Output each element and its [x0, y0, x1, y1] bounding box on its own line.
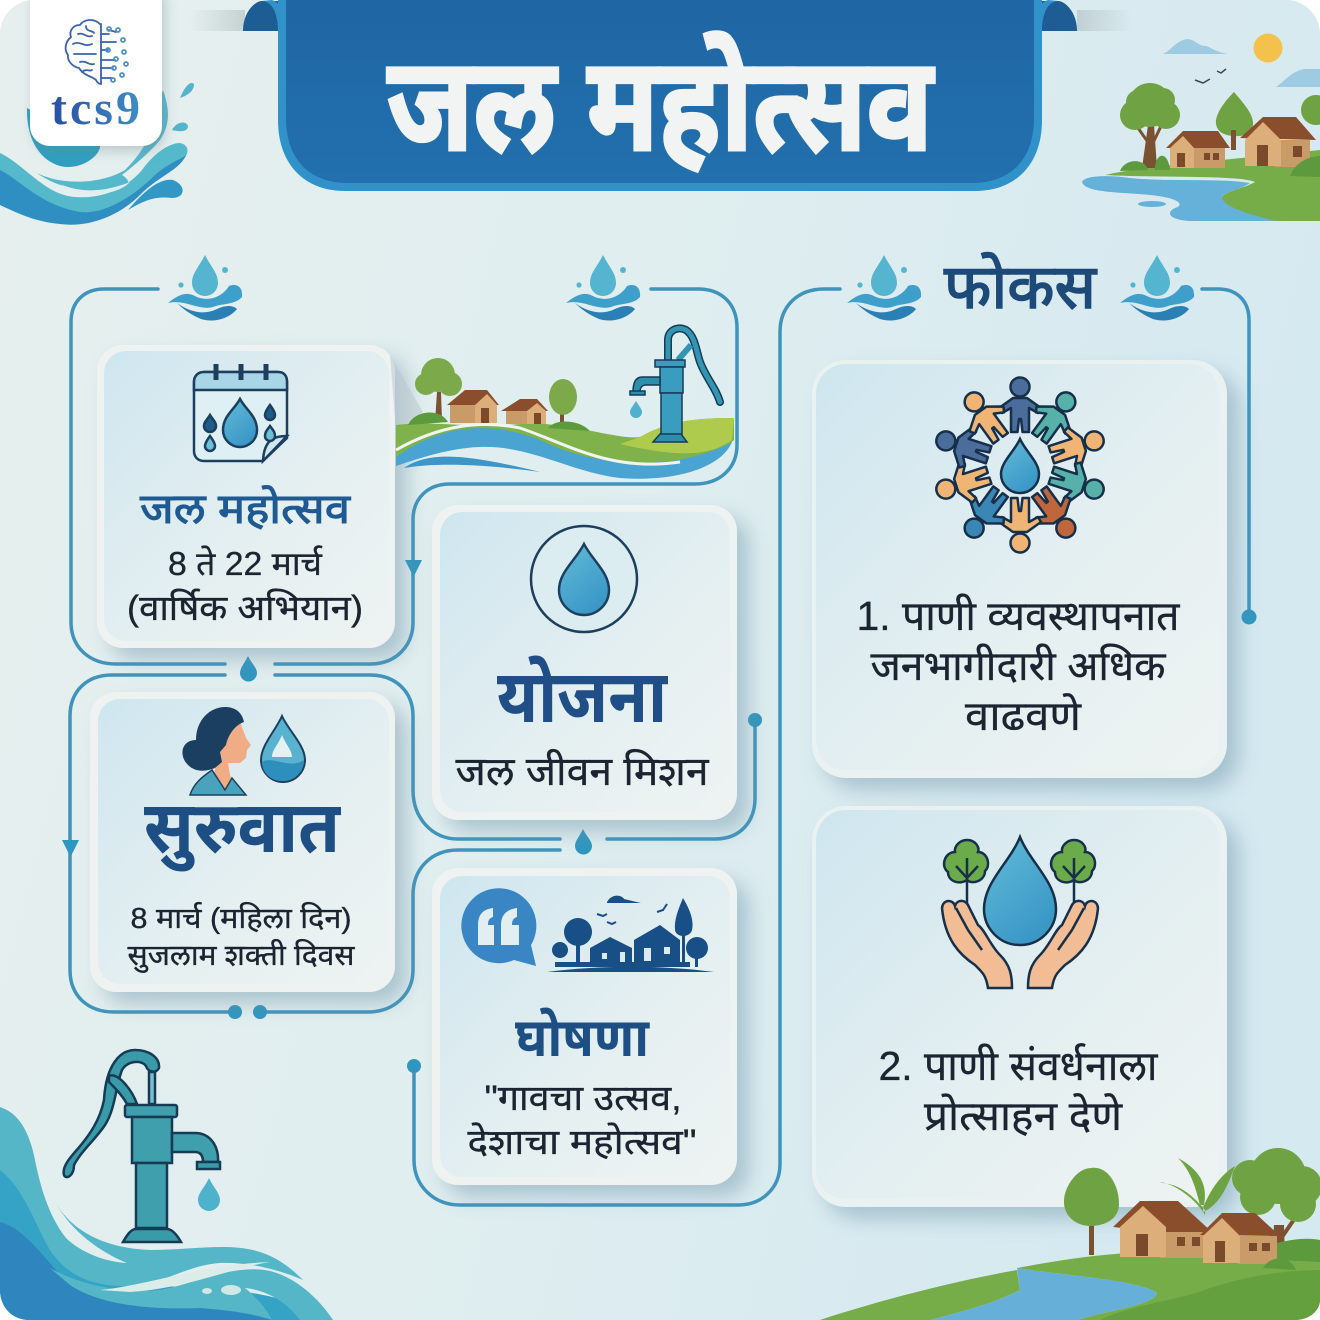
title text: जल महोत्सव — [387, 31, 935, 178]
panel: focus 1 card — [812, 360, 1227, 778]
panel: focus 1 card: वाढवणे — [965, 692, 1082, 739]
illustration: village and hand pump — [390, 328, 734, 479]
panel: focus 2 card: प्रोत्साहन देणे — [924, 1092, 1123, 1139]
card heading: सुरुवात — [144, 788, 341, 872]
big tree — [1272, 1225, 1285, 1262]
icon: calendar — [194, 364, 287, 461]
village: bottom right — [820, 1148, 1320, 1320]
palm — [1160, 1158, 1235, 1215]
wave: top left — [0, 83, 194, 225]
icon: brain circuit — [66, 20, 128, 84]
card heading: घोषणा — [515, 1007, 650, 1068]
wave: bottom left — [0, 1107, 333, 1320]
tree — [1089, 1190, 1094, 1255]
connector lines — [70, 289, 1249, 1205]
card text: 8 ते 22 मार्च — [168, 544, 323, 582]
title banner — [190, 0, 1132, 191]
icon: quote bubble — [461, 888, 536, 966]
card heading: योजना — [497, 655, 668, 738]
village: top right — [1082, 34, 1320, 221]
panel: jal mahotsav card: (वार्षिक अभियान) — [127, 588, 363, 628]
panel: suruvat card: सुजलाम शक्ती दिवस — [128, 939, 356, 973]
panel: jal mahotsav card — [97, 345, 395, 648]
icon: village silhouette — [547, 896, 714, 972]
panel: ghoshana card: देशाचा महोत्सव" — [468, 1122, 696, 1162]
logo card — [30, 0, 162, 146]
panel: ghoshana card — [432, 868, 737, 1185]
connector arrows and dots — [62, 560, 1256, 1073]
card text: 8 मार्च (महिला दिन) — [130, 902, 352, 935]
icon: drop in circle — [531, 526, 637, 632]
houses — [450, 404, 480, 423]
card text: 1. पाणी व्यवस्थापनात — [856, 593, 1180, 639]
panel: yojana card — [432, 505, 737, 820]
houses — [1190, 145, 1225, 168]
splash icons — [168, 255, 1194, 321]
pump handle — [668, 328, 720, 402]
card text: जल जीवन मिशन — [456, 749, 709, 794]
card text: 2. पाणी संवर्धनाला — [878, 1043, 1159, 1089]
panel: focus 1 card: जनभागीदारी अधिक — [870, 643, 1167, 689]
card heading: जल महोत्सव — [140, 485, 351, 532]
icon: circle of people around water drop — [930, 378, 1110, 552]
houses — [1160, 1228, 1210, 1258]
heading: focus: फोकस — [944, 252, 1097, 322]
card text: "गावचा उत्सव, — [484, 1079, 682, 1118]
icon: hands holding drop with trees — [942, 837, 1098, 988]
logo wordmark: tcs9 — [51, 82, 143, 135]
trees — [435, 392, 442, 422]
illustration: hand pump bottom left — [64, 1050, 220, 1242]
icon: woman and drop — [182, 707, 305, 795]
panel: focus 2 card — [812, 806, 1227, 1207]
panel: suruvat card — [90, 692, 395, 992]
